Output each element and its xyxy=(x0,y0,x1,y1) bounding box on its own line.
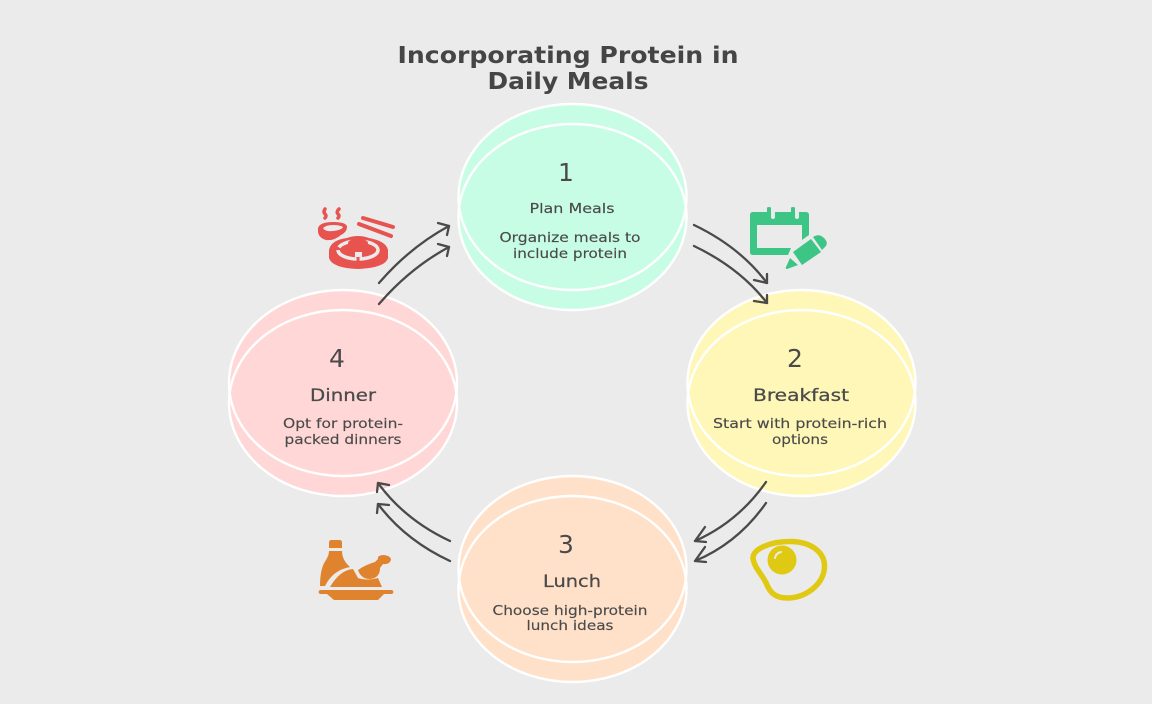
title: Daily Meals xyxy=(488,69,648,95)
step 1: plan meals: Organize meals to xyxy=(500,230,640,246)
step 3: lunch: 3 xyxy=(558,530,574,559)
icon: dinner bowls and chopsticks xyxy=(318,209,393,269)
step 4: dinner: packed dinners xyxy=(284,432,402,448)
arrow: plan meals to breakfast xyxy=(694,225,767,303)
step 4: dinner xyxy=(228,290,458,496)
step 4: dinner: Opt for protein- xyxy=(283,416,403,432)
arrow: dinner to plan meals xyxy=(379,223,449,304)
icon: calendar and pencil xyxy=(750,207,827,269)
step 2: breakfast: options xyxy=(772,432,828,448)
step 3: lunch: lunch ideas xyxy=(526,618,614,634)
step 3: lunch: Lunch xyxy=(543,572,601,592)
step 1: plan meals: Plan Meals xyxy=(530,201,614,217)
step 2: breakfast xyxy=(687,290,916,496)
title xyxy=(398,43,738,95)
step 2: breakfast: 2 xyxy=(787,344,803,373)
step 1: plan meals: include protein xyxy=(513,246,627,262)
step 3: lunch xyxy=(458,476,687,682)
icon: roast chicken and bottle xyxy=(318,540,394,600)
step 2: breakfast: Breakfast xyxy=(753,386,849,406)
step 1: plan meals xyxy=(458,104,687,310)
arrow: breakfast to lunch xyxy=(695,482,766,562)
step 4: dinner: Dinner xyxy=(310,386,376,406)
title: Incorporating Protein in xyxy=(398,43,738,69)
step 3: lunch: Choose high-protein xyxy=(492,603,648,619)
icon: fried egg xyxy=(753,542,824,598)
arrow: lunch to dinner xyxy=(377,483,450,561)
step 4: dinner: 4 xyxy=(329,344,345,373)
step 1: plan meals: 1 xyxy=(558,158,574,187)
step 2: breakfast: Start with protein-rich xyxy=(713,416,887,432)
